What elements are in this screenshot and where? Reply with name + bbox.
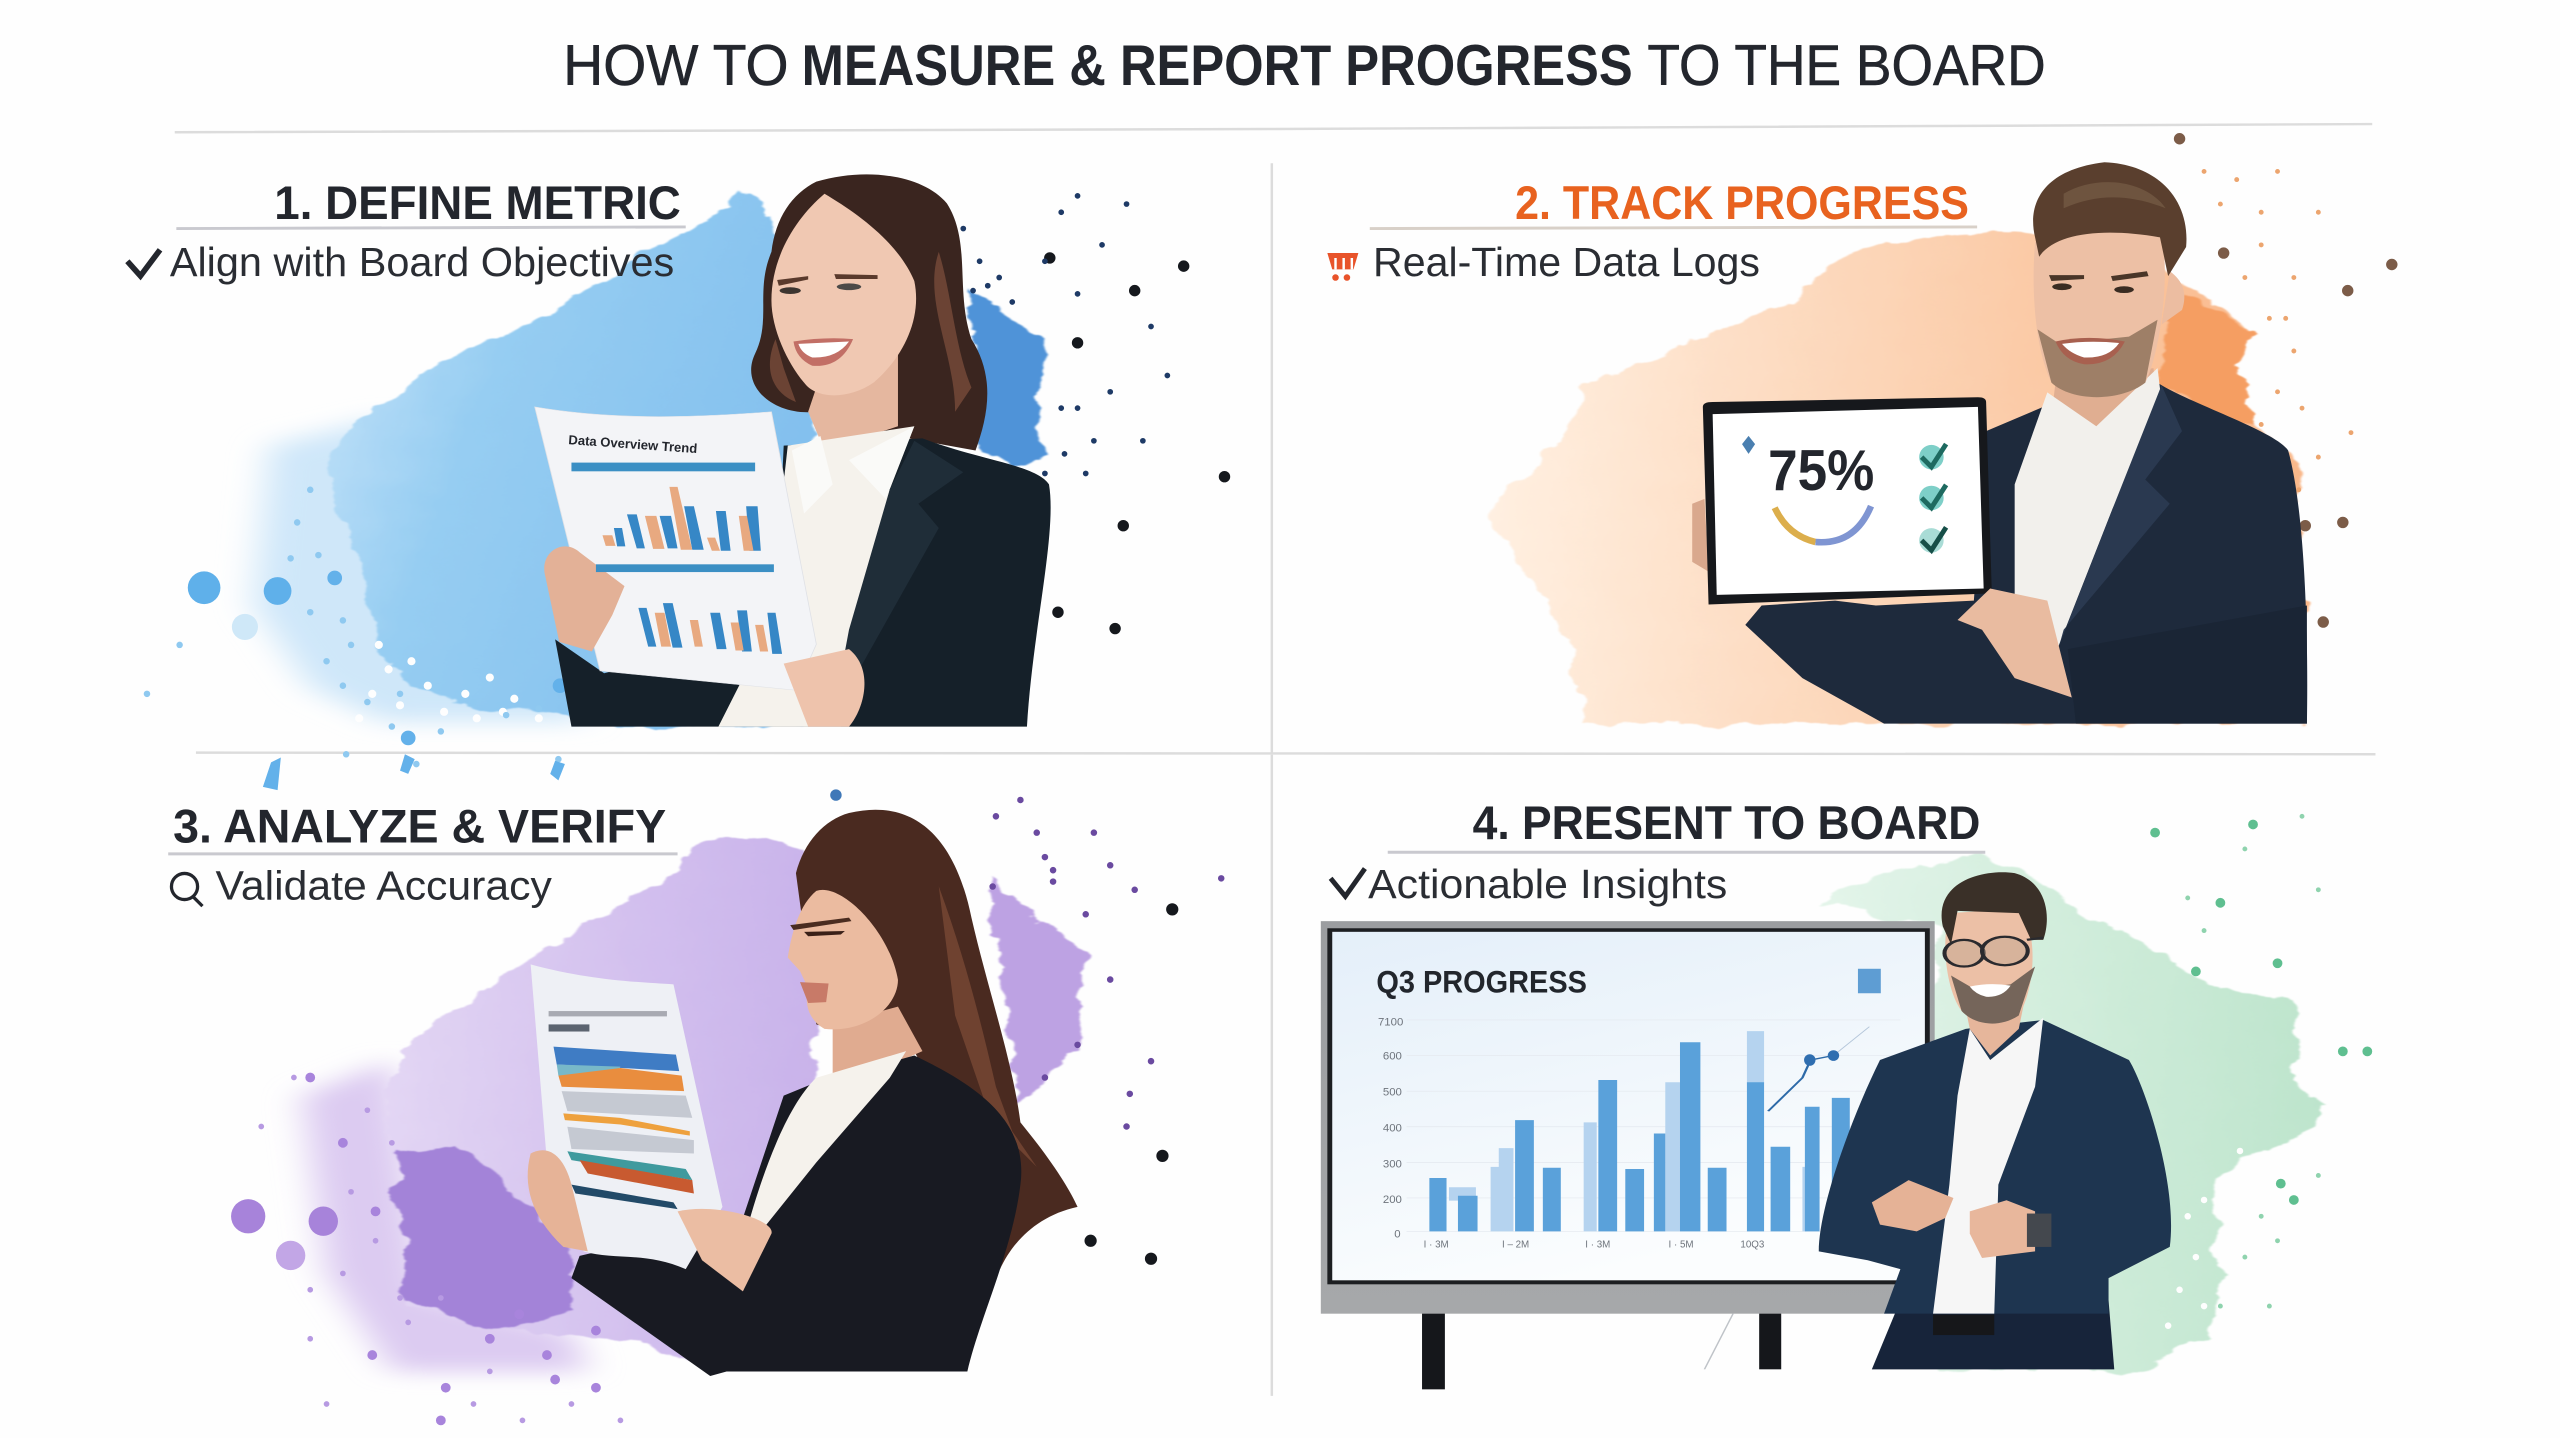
chart labels: I · 5M [1669,1239,1694,1250]
heading: 1. DEFINE METRIC [274,177,681,230]
man presenting [1819,872,2171,1369]
ink splatter [1050,258,1224,629]
woman reading report [528,810,1078,1376]
presentation display [1321,921,1935,1389]
subheading: Real-Time Data Logs [1373,239,1760,285]
icon: magnifier [171,873,202,906]
icon: data log [1327,253,1358,281]
icon: check [1331,869,1365,896]
heading: 4. PRESENT TO BOARD [1473,797,1980,850]
report caption: Data Overview Trend [568,432,698,456]
man with tablet [1692,162,2307,724]
chart labels: 200 [1383,1194,1402,1206]
ink splatter [1091,909,1172,1259]
heading: 2. TRACK PROGRESS [1515,177,1969,230]
heading: 3. ANALYZE & VERIFY [173,800,666,853]
panel: analyze and verify [168,754,1221,1420]
panel: define metric [127,174,1224,764]
subheading: Align with Board Objectives [170,239,674,285]
chart labels: 10Q3 [1740,1239,1765,1250]
tablet readout: 75% [1768,439,1874,503]
title [563,34,2046,98]
chart labels: I · 3M [1585,1239,1610,1250]
orange watercolor splash [1484,233,2300,724]
tablet readout [1742,436,1946,553]
title: TO THE BOARD [1647,34,2046,98]
chart labels: 600 [1383,1051,1402,1063]
chart labels: I · 3M [1424,1239,1449,1250]
chart labels: I – 2M [1502,1239,1529,1250]
chart labels: 400 [1383,1122,1402,1134]
panel: track progress [1327,139,2392,724]
subheading: Validate Accuracy [216,863,552,909]
chart labels [1378,1016,1765,1250]
chart labels: 7100 [1378,1016,1403,1028]
title: HOW TO [563,34,789,98]
stray blue drips from panel above [263,754,565,790]
purple watercolor splash [231,837,1086,1420]
chart labels: 0 [1394,1229,1401,1241]
title: MEASURE & REPORT PROGRESS [802,34,1633,98]
blue watercolor splash [147,194,1049,764]
chart labels: 300 [1383,1158,1402,1170]
icon: check [127,250,160,276]
chart title: Q3 PROGRESS [1376,965,1587,1000]
paint splatter [2180,139,2392,622]
subheading: Actionable Insights [1368,861,1727,907]
green watercolor splash [1819,816,2367,1369]
panel: present to board [1321,797,2367,1389]
woman with report [535,174,1051,727]
chart labels: 500 [1383,1086,1402,1098]
